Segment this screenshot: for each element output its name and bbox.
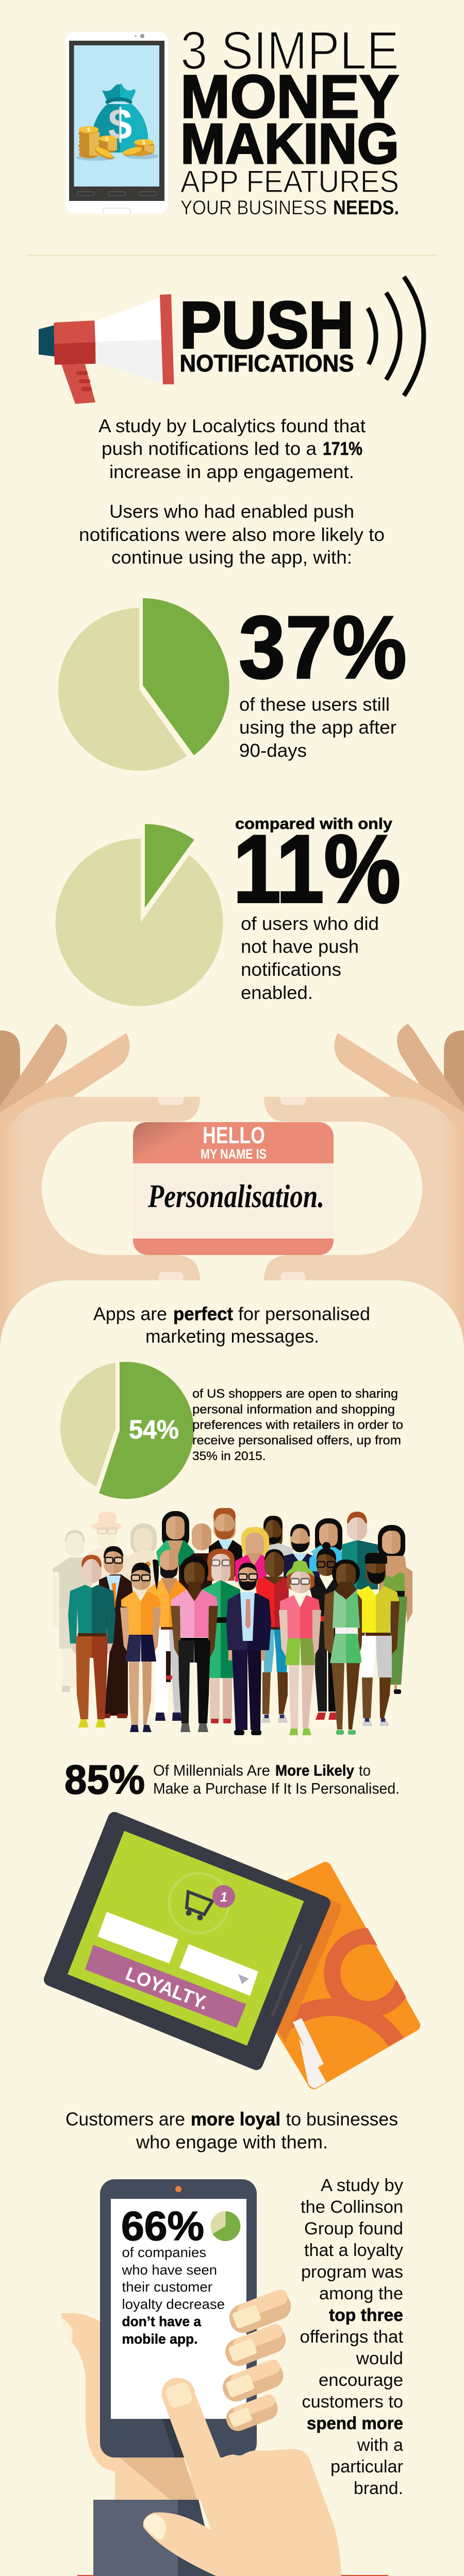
text: collinson group study: brand. — [354, 2479, 403, 2498]
title: APP FEATURES — [180, 164, 399, 199]
middle row person: beard and orange shirt — [147, 1550, 187, 1721]
heading: push notifications: NOTIFICATIONS — [179, 350, 354, 377]
right side woman — [378, 1525, 412, 1694]
pie chart: 54%: 54% — [129, 1415, 179, 1444]
stat: 11%: of users who did — [241, 913, 379, 934]
front row person: pink top — [171, 1556, 218, 1732]
name tag: hello my name is personalisation — [133, 1122, 334, 1255]
icon: coin stacks: $ — [105, 137, 108, 142]
text: US shoppers — [192, 1387, 403, 1463]
stat: 85% of millennials: 85% — [64, 1757, 145, 1802]
stat: 11%: enabled. — [241, 982, 313, 1003]
text: localytics study: 171% — [323, 438, 362, 459]
stat: 85% of millennials: More Likely — [275, 1762, 354, 1780]
illustration: phone with 66% stat — [100, 2179, 257, 2458]
middle row person: red shirt — [255, 1549, 289, 1723]
pie chart: 11% — [56, 824, 223, 1006]
front row person: teal sweater — [68, 1555, 115, 1727]
front row person: green hat — [279, 1561, 321, 1735]
illustration: phone with 66% stat: of companies — [122, 2245, 206, 2260]
icon: shopping cart: 1 — [220, 1889, 227, 1905]
illustration: tablet with loyalty app: LOYALTY. — [123, 1963, 211, 2014]
text: collinson group study: customers to — [302, 2392, 403, 2412]
text: users more likely to continue: notifications were also more likely to — [79, 524, 385, 545]
text: localytics study: push notifications led to a — [102, 438, 317, 459]
text: localytics study: increase in app engagement. — [109, 461, 354, 482]
text: US shoppers: personal information and shopping — [192, 1403, 395, 1417]
icon: money bag: $ — [108, 100, 132, 148]
icon: coin stacks — [76, 126, 158, 161]
text: collinson group study: top three — [329, 2306, 403, 2325]
icon: megaphone — [39, 294, 174, 404]
text: collinson group study: encourage — [319, 2370, 403, 2390]
stat: 37%: using the app after — [239, 717, 396, 738]
text: collinson group study: offerings that — [300, 2327, 404, 2347]
stat: 37% — [239, 597, 407, 761]
illustration: fingers gripping phone — [219, 2287, 295, 2434]
name tag: hello my name is personalisation: HELLO — [203, 1122, 265, 1148]
text: collinson group study: particular — [330, 2457, 403, 2477]
name tag: hello my name is personalisation: Personalisation. — [147, 1178, 324, 1214]
illustration: phone with 66% stat: their customer — [122, 2279, 212, 2295]
stat: 37%: of these users still — [239, 693, 390, 715]
stat: 11%: notifications — [241, 959, 341, 980]
pie chart: 66% — [210, 2211, 240, 2241]
title: 3 SIMPLE — [180, 21, 399, 81]
text: collinson group study: Group found — [304, 2219, 403, 2239]
illustration: phone with 66% stat: 66% — [121, 2203, 204, 2249]
faded back row — [53, 1512, 158, 1692]
text: collinson group study: would — [356, 2349, 403, 2368]
illustration: phone with money bag — [65, 32, 168, 214]
icon: money bag — [91, 83, 148, 152]
text: users more likely to continue: continue using the app, with: — [111, 547, 352, 568]
stat: 37%: 90-days — [239, 740, 307, 761]
illustration: loyalty card — [276, 1862, 420, 2089]
stat: 85% of millennials: Make a Purchase If It Is Personalised. — [153, 1781, 400, 1797]
stat: 11%: compared with only — [235, 815, 393, 833]
title: MONEY — [180, 63, 399, 131]
stat: 85% of millennials: Of Millennials Are — [153, 1762, 270, 1780]
illustration: phone with 66% stat: who have seen — [121, 2262, 217, 2278]
text: collinson group study: program was — [301, 2262, 403, 2282]
text: collinson group study: the Collinson — [301, 2197, 403, 2217]
text: users more likely to continue: Users who had enabled push — [109, 501, 354, 522]
illustration: right hand — [264, 1024, 464, 1349]
illustration: crowd of people — [53, 1508, 412, 1735]
illustration: tablet with loyalty app — [51, 1819, 324, 2063]
stat: 11% — [233, 815, 401, 1003]
title: YOUR BUSINESS — [180, 197, 327, 219]
middle row person: red hair green dress — [202, 1549, 240, 1723]
illustration: shopping bag back — [77, 2575, 388, 2576]
text: localytics study: A study by Localytics found that — [98, 415, 366, 436]
pie chart: 54% — [60, 1362, 194, 1499]
middle row person: brown suit — [99, 1546, 134, 1718]
icon: coin stacks: $ — [87, 127, 90, 133]
title: MAKING — [180, 112, 399, 176]
text: customers more loyal: more loyal — [191, 2109, 280, 2130]
illustration: sleeves — [93, 2500, 362, 2576]
front row person: navy suit — [226, 1563, 271, 1735]
text: customers more loyal: to businesses — [286, 2109, 398, 2130]
text: collinson group study: among the — [319, 2284, 403, 2303]
pie chart: 37% — [58, 598, 229, 771]
stat: 11%: not have push — [241, 936, 359, 957]
text: collinson group study: spend more — [307, 2414, 403, 2433]
text: US shoppers: 35% in 2015. — [192, 1449, 266, 1463]
text: collinson group study: that a loyalty — [304, 2241, 403, 2260]
illustration: left hand — [0, 1024, 200, 1349]
front row person: orange top — [120, 1560, 161, 1732]
stat: 11%: 11% — [233, 815, 401, 923]
text: apps are perfect: perfect — [173, 1303, 233, 1324]
text: customers more loyal: Customers are — [65, 2109, 185, 2130]
text: customers more loyal — [65, 2109, 398, 2153]
text: collinson group study: A study by — [321, 2176, 403, 2195]
illustration: pointing hand — [143, 2378, 356, 2576]
title — [180, 21, 399, 219]
illustration: phone with 66% stat: loyalty decrease — [122, 2297, 225, 2312]
text: apps are perfect: marketing messages. — [145, 1326, 319, 1347]
text: users more likely to continue — [79, 501, 385, 568]
text: US shoppers: receive personalised offers, up from — [192, 1433, 401, 1448]
heading: push notifications: PUSH — [179, 289, 354, 362]
text: US shoppers: preferences with retailers in order to — [192, 1418, 403, 1432]
icon: money bag: $ — [108, 100, 132, 148]
text: US shoppers: of US shoppers are open to sharing — [192, 1387, 398, 1401]
text: apps are perfect: Apps are — [93, 1303, 167, 1324]
stat: 85% of millennials — [64, 1757, 400, 1802]
front row person: green dress — [324, 1560, 368, 1735]
illustration: holding hand — [60, 2313, 206, 2500]
stat: 85% of millennials: to — [359, 1762, 371, 1780]
icon: sound waves — [368, 277, 424, 396]
title: NEEDS. — [333, 197, 399, 219]
icon: coin stacks: $ — [142, 140, 145, 146]
stat: 37%: 37% — [239, 597, 407, 697]
illustration: phone with 66% stat: mobile app. — [122, 2331, 198, 2347]
front row person: yellow shirt — [356, 1553, 400, 1726]
name tag: hello my name is personalisation: MY NAME IS — [201, 1146, 267, 1162]
middle row person: black outfit — [308, 1542, 341, 1720]
text: customers more loyal: who engage with them. — [136, 2131, 328, 2153]
text: apps are perfect: for personalised — [238, 1303, 370, 1324]
text: collinson group study — [300, 2176, 404, 2498]
text: localytics study — [98, 415, 366, 482]
text: collinson group study: with a — [357, 2435, 403, 2455]
back row people — [156, 1508, 378, 1602]
illustration: phone with 66% stat: don’t have a — [122, 2314, 202, 2329]
text: apps are perfect — [93, 1303, 370, 1347]
icon: shopping cart — [186, 1885, 235, 1921]
